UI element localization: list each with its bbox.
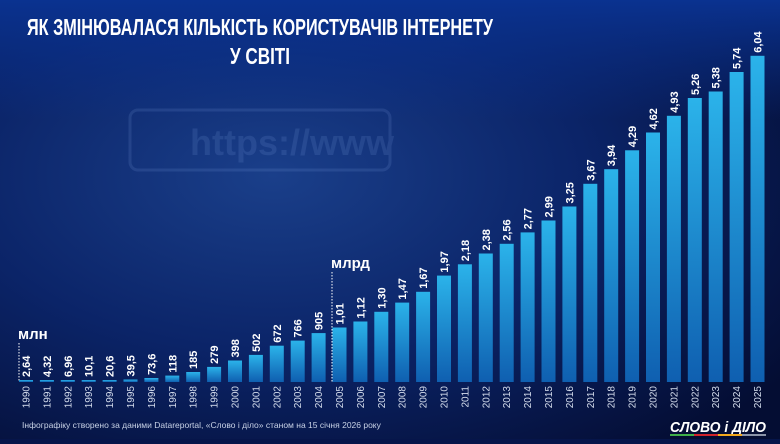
value labels: 185 xyxy=(188,351,200,369)
year axis labels: 1996 xyxy=(147,386,158,408)
value labels: 1,01 xyxy=(334,303,346,324)
value labels xyxy=(21,31,764,377)
value labels: 766 xyxy=(293,319,305,338)
unit label: млрд: млрд xyxy=(331,255,370,272)
value labels: 4,93 xyxy=(669,91,681,113)
year axis labels: 1992 xyxy=(63,386,74,408)
background: https www: https://www xyxy=(190,122,395,163)
value labels: 73,6 xyxy=(146,354,158,375)
value labels: 1,97 xyxy=(439,251,451,273)
year axis labels: 2022 xyxy=(690,386,701,408)
year axis labels: 1999 xyxy=(210,386,221,408)
value labels: 5,38 xyxy=(711,67,723,88)
value labels: 20,6 xyxy=(105,356,117,377)
year axis labels: 1997 xyxy=(168,386,179,408)
value labels: 1,30 xyxy=(376,287,388,309)
year axis labels: 1990 xyxy=(22,386,32,408)
year axis labels: 2002 xyxy=(272,386,283,408)
year axis labels: 2010 xyxy=(440,386,450,408)
year axis labels: 2008 xyxy=(398,386,409,408)
year axis labels: 1994 xyxy=(105,386,116,408)
title: ЯК ЗМІНЮВАЛАСЯ КІЛЬКІСТЬ КОРИСТУВАЧІВ ІНТЕРНЕТУ xyxy=(27,14,493,40)
year axis labels: 2018 xyxy=(607,386,618,408)
value labels: 2,38 xyxy=(481,229,493,250)
year axis labels: 2015 xyxy=(544,386,555,408)
value labels: 39,5 xyxy=(126,355,138,376)
value labels: 2,64 xyxy=(21,355,33,377)
year axis labels: 2003 xyxy=(293,386,304,408)
year axis labels: 2019 xyxy=(628,386,639,408)
value labels: 5,26 xyxy=(690,74,702,95)
value labels: 502 xyxy=(251,334,263,352)
value labels: 6,96 xyxy=(63,356,75,377)
value labels: 10,1 xyxy=(84,356,96,377)
background: https www xyxy=(130,110,395,170)
value labels: 2,99 xyxy=(544,196,556,218)
value labels: 1,12 xyxy=(355,297,367,318)
value labels: 3,94 xyxy=(606,144,618,166)
value labels: 2,18 xyxy=(460,240,472,261)
year axis labels: 2024 xyxy=(732,386,743,408)
year axis labels: 2001 xyxy=(251,386,262,408)
value labels: 1,67 xyxy=(418,267,430,289)
year axis labels: 2025 xyxy=(753,386,764,408)
year axis labels: 2004 xyxy=(314,386,325,408)
year axis labels: 2012 xyxy=(481,386,492,408)
year axis labels xyxy=(22,386,764,408)
year axis labels: 1993 xyxy=(84,386,95,408)
year axis labels: 2023 xyxy=(711,386,722,408)
year axis labels: 2009 xyxy=(419,386,430,408)
value labels: 905 xyxy=(314,312,326,330)
title: У СВІТІ xyxy=(230,43,290,69)
value labels: 4,29 xyxy=(627,126,639,147)
logo: СЛОВО і ДІЛО xyxy=(670,419,766,436)
year axis labels: 1998 xyxy=(189,386,200,408)
value labels: 279 xyxy=(209,346,221,364)
year axis labels: 2021 xyxy=(669,386,680,408)
year axis labels: 2014 xyxy=(523,386,534,408)
value labels: 3,25 xyxy=(564,182,576,204)
title xyxy=(27,14,493,69)
footer source text: Інфографіку створено за даними Datareportal, «Слово і діло» станом на 15 січня 2026 року xyxy=(22,420,382,430)
value labels: 4,62 xyxy=(648,108,660,130)
year axis labels: 2020 xyxy=(648,386,660,408)
value labels: 2,77 xyxy=(523,208,535,229)
value labels: 118 xyxy=(167,355,179,373)
year axis labels: 2017 xyxy=(586,386,597,408)
year axis labels: 2006 xyxy=(356,386,367,408)
year axis labels: 2013 xyxy=(502,386,513,408)
value labels: 5,74 xyxy=(732,47,744,69)
year axis labels: 2011 xyxy=(460,386,471,408)
year axis labels: 1991 xyxy=(42,386,53,408)
bar chart xyxy=(19,56,764,382)
value labels: 6,04 xyxy=(752,31,764,53)
unit label: млн: млн xyxy=(18,326,48,343)
value labels: 672 xyxy=(272,324,284,343)
year axis labels: 2016 xyxy=(565,386,576,408)
year axis labels: 2007 xyxy=(377,386,388,408)
value labels: 4,32 xyxy=(42,356,54,377)
year axis labels: 1995 xyxy=(126,386,137,408)
year axis labels: 2000 xyxy=(230,386,242,408)
value labels: 3,67 xyxy=(585,159,597,181)
value labels: 398 xyxy=(230,339,242,358)
value labels: 2,56 xyxy=(502,219,514,241)
value labels: 1,47 xyxy=(397,278,409,300)
year axis labels: 2005 xyxy=(335,386,346,408)
